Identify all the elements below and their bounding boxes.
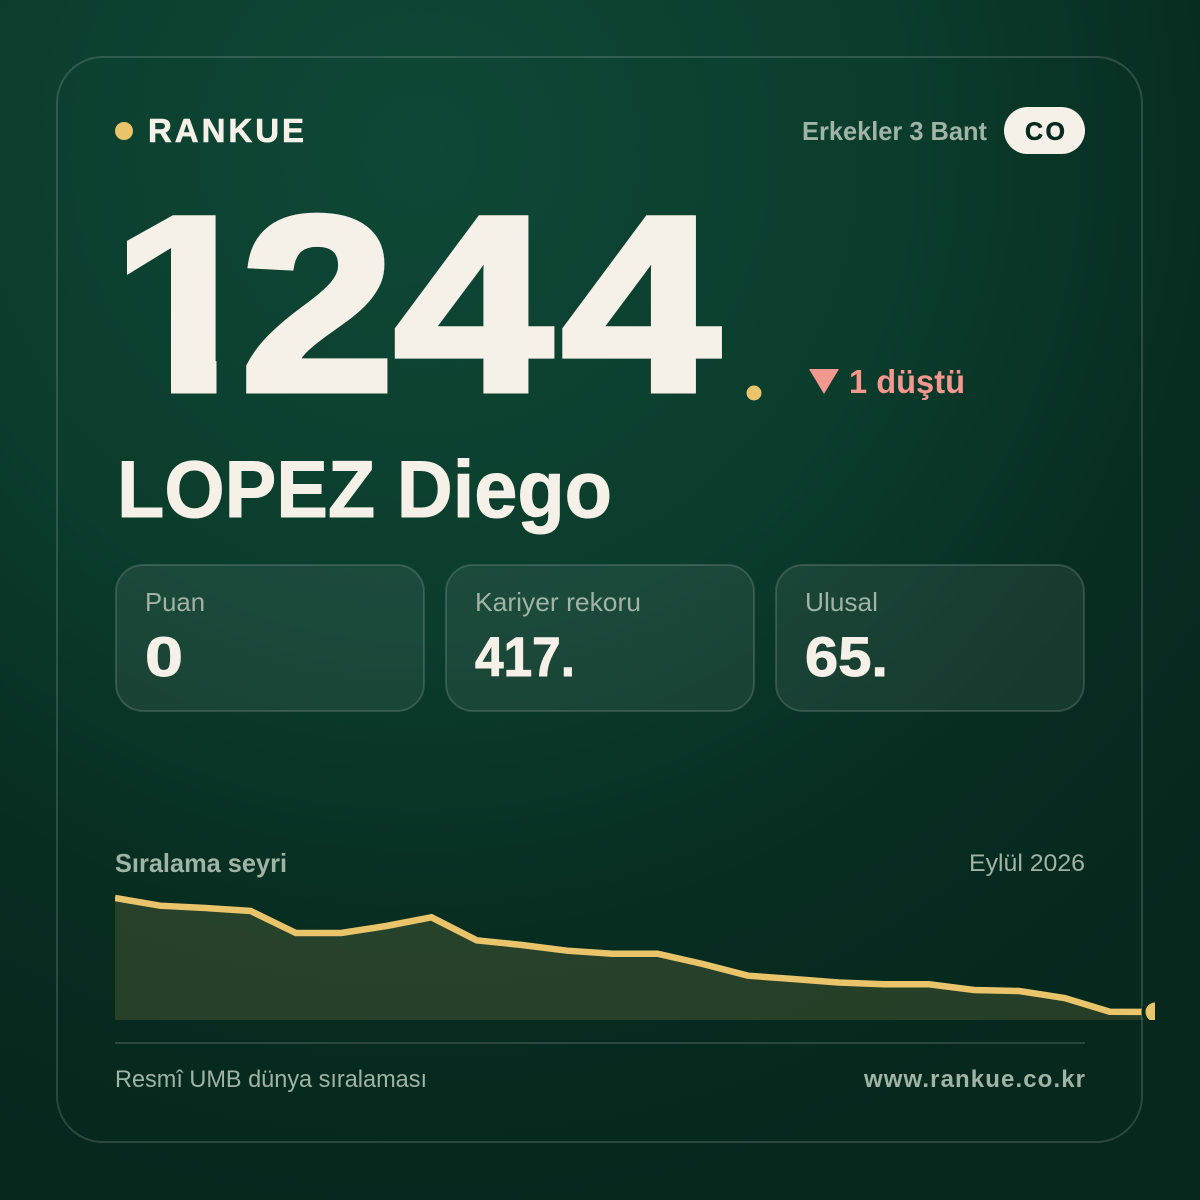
panel: career high: 417. [475,625,575,688]
footer website: www.rankue.co.kr [863,1066,1085,1093]
player name: LOPEZ Diego [117,445,612,535]
panel: career high [446,565,754,711]
line chart: ranking trend [115,898,1166,1024]
rank number: 4 [394,166,554,443]
rank dot [746,386,762,400]
rank change: 1 düştü [849,363,965,400]
panel: national [776,565,1084,711]
footer divider [115,1042,1085,1044]
country badge [1004,107,1085,154]
chart date: Eylül 2026 [969,850,1085,877]
panel: national: Ulusal [805,587,878,617]
rank number: 2 [240,165,395,443]
panel: career high: Kariyer rekoru [475,587,641,617]
footer source note: Resmî UMB dünya sıralaması [115,1066,427,1093]
panel: points: 0 [145,625,183,688]
panel: national: 65. [805,625,888,688]
panel: points: Puan [145,587,205,617]
rank number: 1 [104,166,265,444]
country badge: CO [1025,118,1065,146]
brand logo: RANKUE [148,112,304,149]
category label: Erkekler 3 Bant [802,116,987,146]
rank number [127,212,722,394]
chart heading: Sıralama seyri [115,848,287,878]
panel: points [116,565,424,711]
rank number: 4 [562,166,721,443]
